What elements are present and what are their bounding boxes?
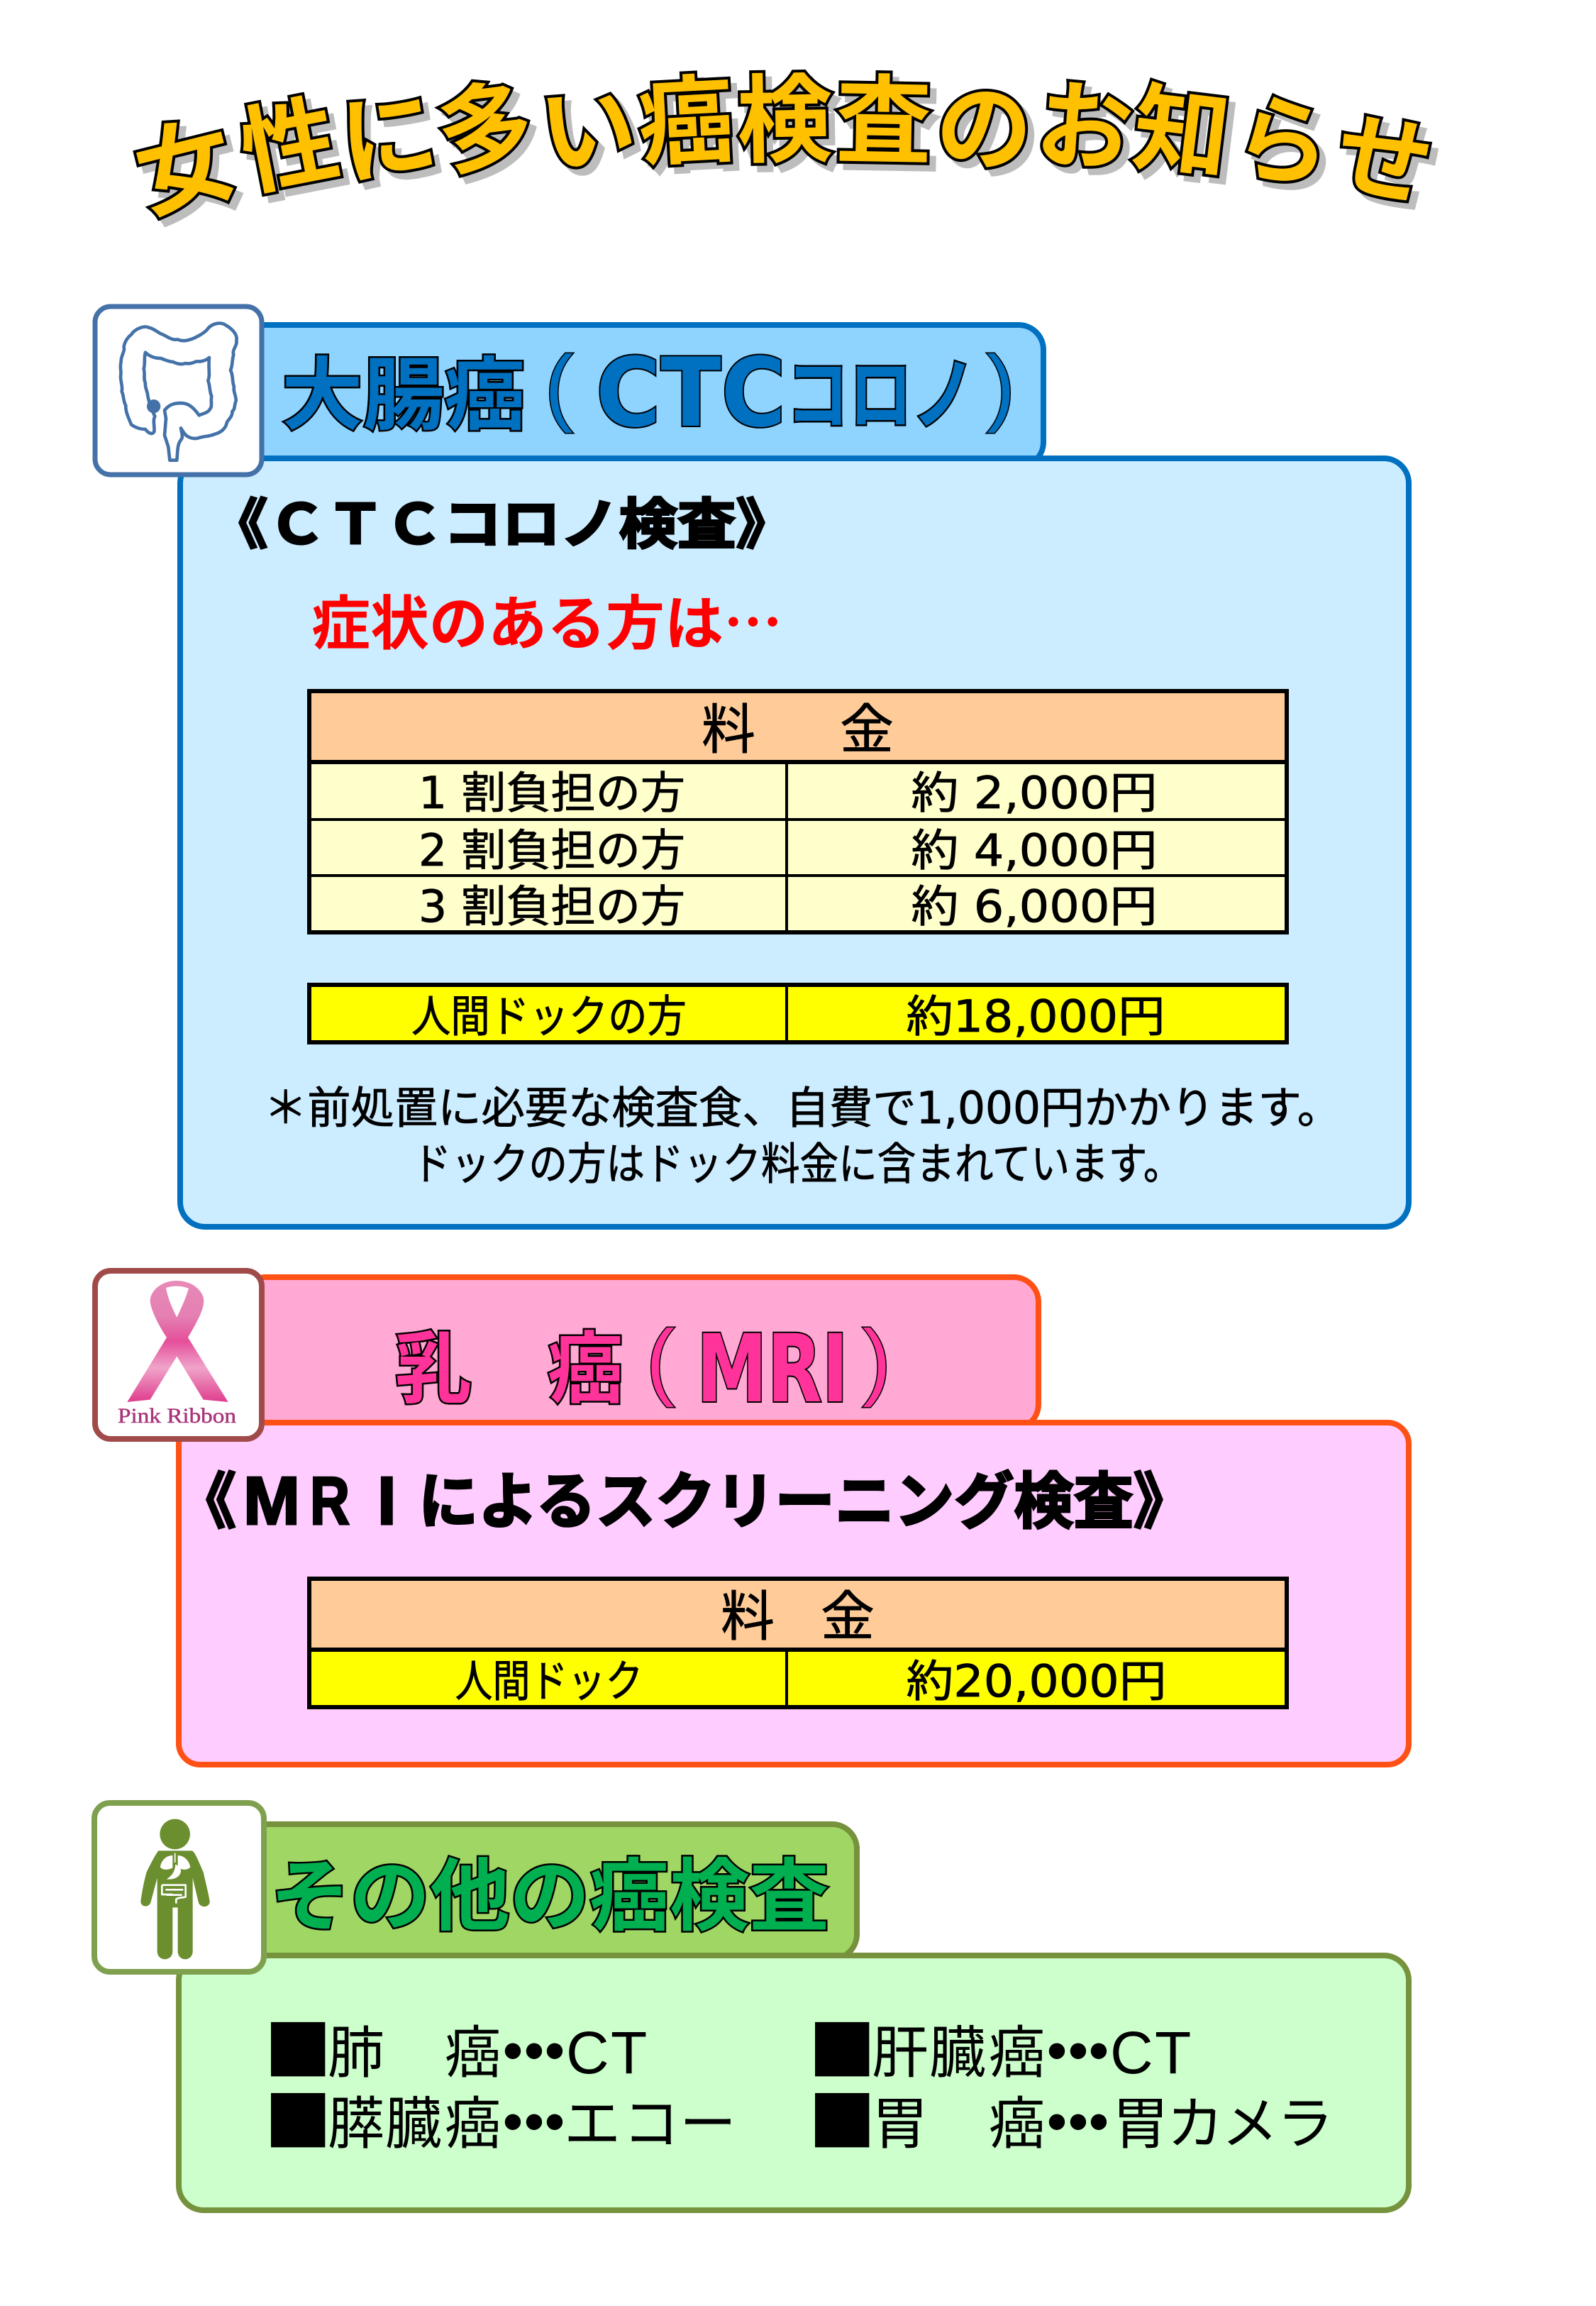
title: 多 xyxy=(428,46,541,196)
list: stomach cancer: 胃カメラ xyxy=(1112,2078,1334,2161)
title: 性 xyxy=(228,60,348,215)
list: pancreatic cancer: エコー xyxy=(564,2078,736,2161)
price table: insured: 料 xyxy=(702,698,755,761)
list: pancreatic cancer: ■ xyxy=(265,2073,331,2156)
subheading: MRI screening: M xyxy=(243,1463,300,1539)
title: の xyxy=(933,49,1036,192)
list: stomach cancer: 胃 癌 xyxy=(872,2078,1046,2161)
panel: breast details xyxy=(175,1423,1409,1765)
list: lung cancer: CT xyxy=(566,2019,647,2086)
list: liver cancer: ■ xyxy=(809,2002,875,2085)
heading tab: colorectal: CTC xyxy=(596,338,786,448)
icon: pink ribbon xyxy=(95,1271,262,1439)
heading tab: colorectal: コロノ xyxy=(786,331,975,446)
heading tab: breast: 乳 xyxy=(395,1306,472,1419)
price table: insured xyxy=(307,689,1289,932)
subheading: CTC colonography: 《ＣＴＣコロノ検査》 xyxy=(209,481,794,560)
heading tab: colorectal: ( xyxy=(545,338,573,434)
title: 査 xyxy=(835,43,933,183)
price table: MRI: 料 xyxy=(721,1585,775,1648)
title: 検 xyxy=(736,42,833,182)
title: 知 xyxy=(1126,50,1238,199)
ribbon caption: Pink Ribbon xyxy=(118,1404,236,1428)
price table: MRI: 約20,000円 xyxy=(907,1655,1166,1707)
list: pancreatic cancer: 膵臓癌 xyxy=(328,2078,501,2161)
icon: large intestine xyxy=(95,307,262,475)
title: 女 xyxy=(120,80,246,238)
heading tab: breast xyxy=(241,1277,1038,1429)
price table: health check: 人間ドックの方 xyxy=(411,991,687,1042)
icon: human body xyxy=(94,1803,264,1972)
section: colorectal cancer xyxy=(95,307,1409,1227)
list: pancreatic cancer: ･･･ xyxy=(499,2078,569,2161)
list: liver cancer xyxy=(809,2002,1191,2090)
list: stomach cancer: ･･･ xyxy=(1043,2078,1113,2161)
section: breast cancer xyxy=(95,1271,1409,1765)
symptom note: 症状のある方は… xyxy=(311,576,782,661)
price table: insured: 約 4,000円 xyxy=(911,824,1158,876)
subheading: MRI screening: によるスクリーニング検査》 xyxy=(419,1452,1193,1540)
price table: insured: 金 xyxy=(840,698,894,761)
title: に xyxy=(329,53,445,206)
section: other cancers xyxy=(94,1803,1409,2210)
list: lung cancer: ■ xyxy=(265,2002,331,2085)
list: liver cancer: 肝臓癌 xyxy=(872,2007,1046,2090)
price table: MRI xyxy=(309,1579,1287,1707)
heading tab: other: その他の癌検査 xyxy=(270,1832,829,1946)
heading tab: breast: MRI xyxy=(697,1315,848,1424)
subheading: MRI screening: R xyxy=(310,1463,350,1539)
price table: insured: 2 割負担の方 xyxy=(419,824,685,876)
list: liver cancer: CT xyxy=(1110,2019,1191,2086)
heading tab: colorectal: 大腸癌 xyxy=(282,331,526,446)
price table: health check xyxy=(309,985,1287,1042)
list: liver cancer: ･･･ xyxy=(1043,2007,1113,2090)
heading tab: breast: ( xyxy=(646,1313,675,1408)
title: せ xyxy=(1324,73,1447,229)
list: lung cancer: ･･･ xyxy=(499,2007,569,2090)
list: lung cancer xyxy=(265,2002,647,2090)
heading tab: colorectal xyxy=(241,325,1043,467)
price table: insured: 約 2,000円 xyxy=(911,767,1158,819)
price table: insured: 3 割負担の方 xyxy=(419,881,685,932)
footnote: ＊前処置に必要な検査食、自費で1,000円かかります。 xyxy=(264,1082,1341,1134)
price table: health check: 約18,000円 xyxy=(907,991,1165,1042)
panel: colorectal details xyxy=(180,458,1409,1227)
footnote xyxy=(264,1082,1341,1190)
title: い xyxy=(533,48,641,195)
panel: other details xyxy=(179,1955,1409,2210)
price table: insured: 1 割負担の方 xyxy=(419,767,685,819)
price table: MRI: 金 xyxy=(821,1585,875,1648)
subheading: MRI screening: 《 xyxy=(175,1452,236,1540)
heading tab: breast: ) xyxy=(863,1313,891,1408)
list: pancreatic cancer xyxy=(265,2073,736,2161)
heading tab: colorectal: ) xyxy=(987,338,1015,434)
footnote: ドックの方はドック料金に含まれています。 xyxy=(413,1138,1182,1190)
list: stomach cancer xyxy=(809,2073,1334,2161)
heading tab: breast: 癌 xyxy=(548,1306,624,1419)
list: lung cancer: 肺 癌 xyxy=(328,2007,501,2090)
price table: MRI: 人間ドック xyxy=(455,1655,643,1707)
title: お xyxy=(1031,46,1139,193)
title: ら xyxy=(1226,57,1342,210)
title xyxy=(120,42,1447,238)
title: 癌 xyxy=(634,42,737,185)
subheading: MRI screening: I xyxy=(377,1463,397,1539)
list: stomach cancer: ■ xyxy=(809,2073,875,2156)
price table: insured: 約 6,000円 xyxy=(911,881,1158,932)
